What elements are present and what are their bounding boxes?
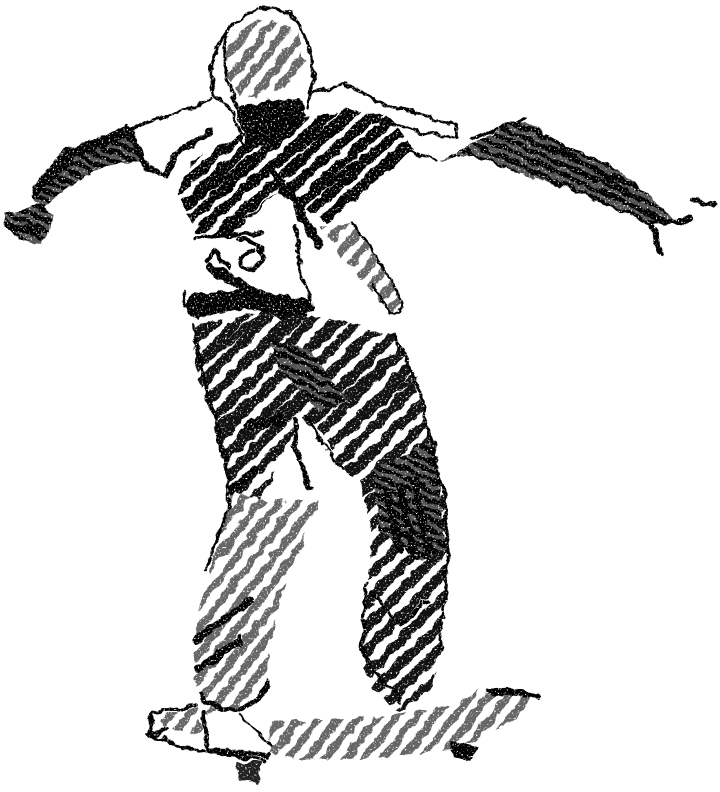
- head and hood: [211, 8, 313, 146]
- right arm, upper outline: [310, 84, 458, 160]
- waistband: [182, 290, 310, 324]
- torso hatching: [178, 110, 415, 306]
- right forearm and hand hatching: [440, 118, 712, 252]
- shoe: [204, 712, 272, 755]
- trousers: [192, 312, 448, 712]
- left arm and hand: [3, 98, 212, 244]
- hanging hand: [320, 222, 402, 316]
- skateboard: [148, 690, 538, 785]
